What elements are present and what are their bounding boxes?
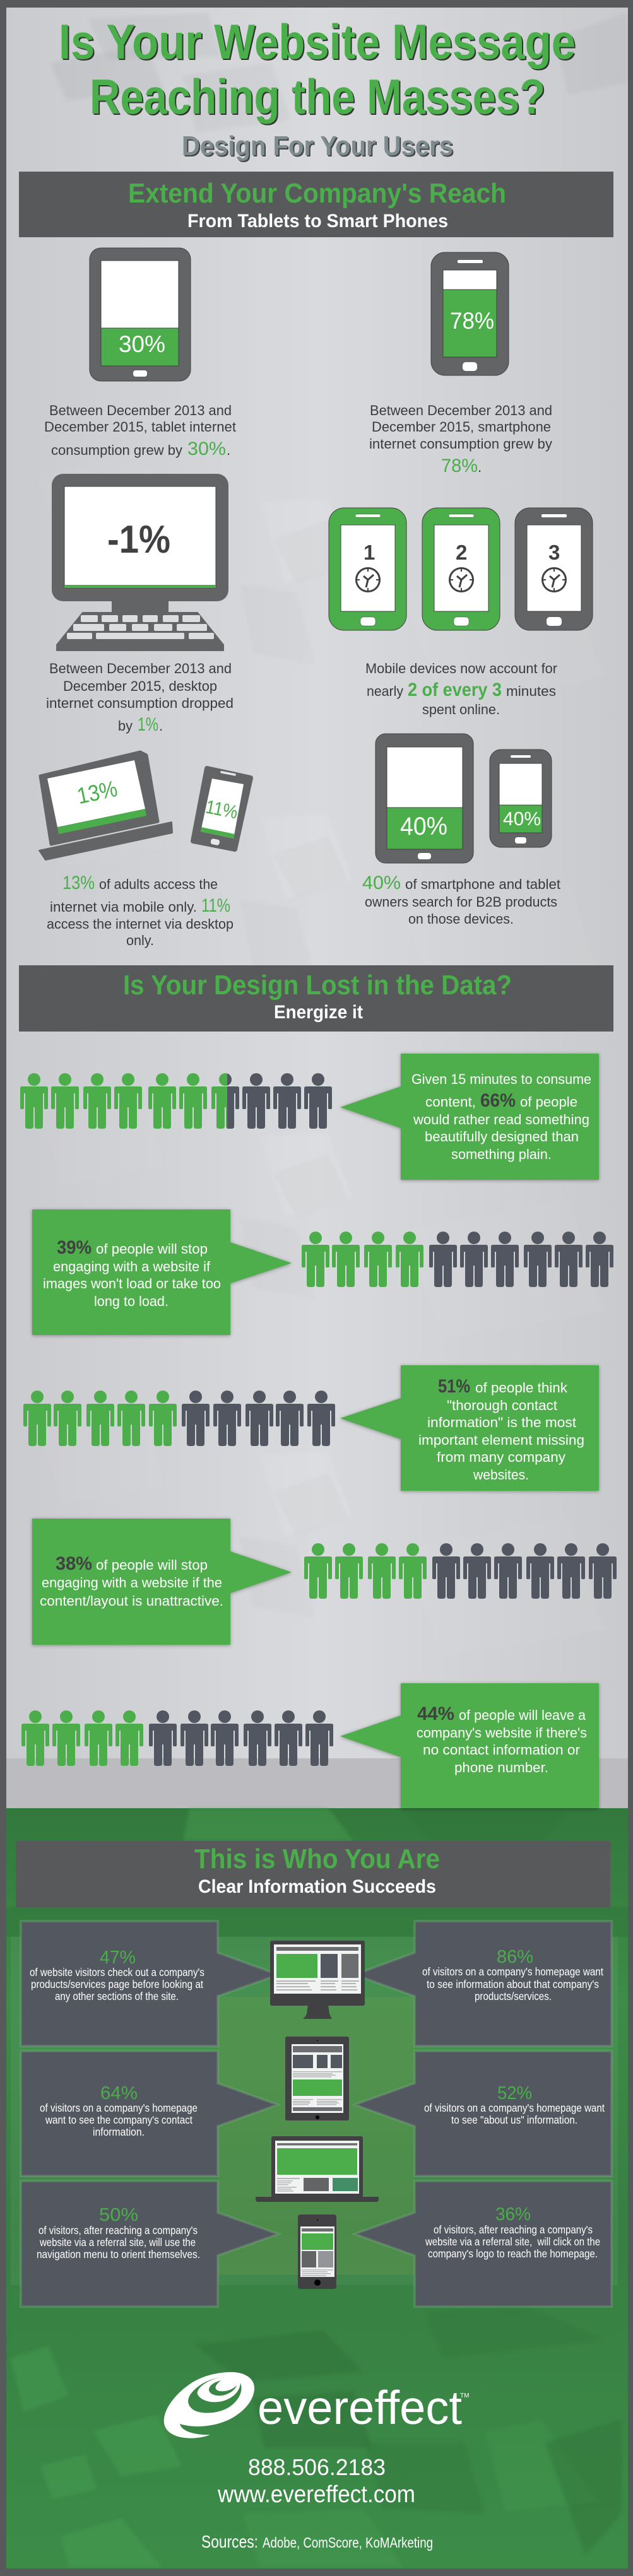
- icon: tablet 30%: [90, 248, 191, 381]
- icon: tablet 30%: 30%: [119, 331, 165, 357]
- icon: three phones with clocks: [329, 508, 593, 630]
- text: smartphone growth: 78%: [441, 456, 478, 476]
- panel: 47%: any other sections of the site.: [55, 1990, 179, 2003]
- icon: tilted phone 11%: 11%: [204, 797, 239, 823]
- icon: phone 78%: 78%: [450, 308, 494, 334]
- text: adults access: 13%: [62, 873, 95, 893]
- callout: 38%: content/layout is unattractive.: [40, 1593, 223, 1609]
- callout: 44%: company's website if there's: [417, 1725, 587, 1741]
- icon: desktop computer -1%: [52, 474, 228, 650]
- callout: 51%: information" is the most: [427, 1414, 576, 1430]
- callout: 51%: from many company: [437, 1449, 565, 1465]
- text: tablet growth: .: [227, 442, 230, 458]
- panel: 50%: navigation menu to orient themselves.: [37, 2248, 200, 2261]
- logo wordmark: TM: [460, 2392, 469, 2399]
- text: smartphone growth: .: [478, 459, 482, 475]
- icon: phone wireframe: [298, 2214, 336, 2289]
- panel: 52%: of visitors on a company's homepage want: [424, 2102, 605, 2114]
- callout: 44%: [340, 1683, 599, 1808]
- text: desktop drop: December 2015, desktop: [63, 678, 217, 694]
- text: smartphone growth: [369, 403, 552, 476]
- title: Reaching the Masses?: [90, 69, 545, 124]
- panel: 64%: want to see the company's contact: [45, 2114, 192, 2126]
- sources: [201, 2532, 433, 2551]
- phone 3: 3: [548, 541, 560, 564]
- sources: Adobe, ComScore, KoMArketing: [263, 2534, 433, 2551]
- panel: 50%: website via a referral site, will use the: [39, 2236, 196, 2249]
- callout: 51%: [340, 1365, 599, 1491]
- callout: 51%: "thorough contact: [447, 1397, 557, 1413]
- contact details: [217, 2454, 415, 2508]
- text: smartphone growth: internet consumption grew by: [369, 436, 552, 452]
- callout: 39%: 39%: [57, 1237, 92, 1258]
- callout: 66%: [340, 1054, 599, 1180]
- section header: extend reach: Extend Your Company's Reach: [128, 178, 506, 209]
- section header: extend reach: [19, 172, 613, 237]
- panel: 50%: of visitors, after reaching a company's: [38, 2224, 198, 2237]
- contact details: 888.506.2183: [248, 2454, 386, 2480]
- text: adults access: 11%: [201, 895, 230, 916]
- contact details: www.evereffect.com: [217, 2481, 415, 2508]
- text: desktop drop: internet consumption dropped: [46, 695, 234, 711]
- icon: laptop 13%: 13%: [74, 775, 119, 809]
- callout: 38%: 38%: [56, 1553, 92, 1574]
- callout: 66%: content,: [425, 1094, 476, 1110]
- panel: 52%: to see "about us" information.: [451, 2114, 577, 2126]
- panel: 50%: [21, 2181, 278, 2307]
- text: mobile minutes: spent online.: [422, 702, 500, 717]
- panel: 64%: [21, 2051, 278, 2176]
- panel: 52%: [355, 2051, 612, 2176]
- callout: 39%: [32, 1209, 292, 1335]
- callout: 66%: of people: [520, 1094, 577, 1110]
- text: tablet growth: consumption grew by: [51, 442, 182, 458]
- callout: 51%: important element missing: [418, 1432, 584, 1448]
- section header: design lost: [19, 965, 613, 1032]
- logo: evereffect: [164, 2372, 469, 2438]
- panel: 52%: 52%: [497, 2083, 532, 2103]
- text: mobile minutes: 2 of every 3: [408, 679, 502, 700]
- text: adults access: access the internet via desktop: [47, 916, 234, 932]
- text: mobile minutes: [365, 661, 557, 717]
- title: Is Your Website Message: [59, 14, 576, 69]
- callout: 44%: phone number.: [454, 1760, 548, 1775]
- text: smartphone growth: Between December 2013 and: [370, 403, 552, 418]
- text: adults access: [47, 873, 234, 948]
- panel: 86%: 86%: [497, 1947, 533, 1967]
- panel: 86%: [355, 1921, 612, 2046]
- section header: design lost: Is Your Design Lost in the Data?: [123, 970, 512, 1001]
- icon: desktop computer -1%: -1%: [107, 518, 170, 562]
- callout: 44%: no contact information or: [423, 1742, 580, 1758]
- icon: desktop wireframe: [270, 1941, 365, 2019]
- callout: 38%: of people will stop: [96, 1557, 208, 1573]
- text: smartphone growth: December 2015, smartphone: [372, 419, 551, 435]
- text: mobile minutes: Mobile devices now account for: [365, 661, 557, 676]
- panel: 47%: 47%: [100, 1948, 136, 1968]
- callout: 39%: engaging with a website if: [53, 1259, 211, 1274]
- text: adults access: of adults access the: [99, 876, 218, 892]
- title: [59, 14, 576, 124]
- subtitle: Design For Your Users: [182, 131, 453, 162]
- callout: 44%: of people will leave a: [459, 1707, 586, 1723]
- logo wordmark: evereffect: [257, 2381, 462, 2434]
- callout: 66%: beautifully designed than: [425, 1129, 579, 1144]
- section header: extend reach: From Tablets to Smart Phones: [187, 211, 448, 232]
- icon: phone 78%: [431, 252, 509, 375]
- people row 51%: [23, 1391, 335, 1446]
- callout: 66%: something plain.: [451, 1146, 552, 1162]
- text: desktop drop: .: [159, 718, 163, 734]
- phone 2: [422, 508, 500, 630]
- callout: 44%: 44%: [417, 1703, 454, 1724]
- callout: 51%: of people think: [475, 1380, 568, 1396]
- panel: 50%: 50%: [99, 2205, 138, 2225]
- panel: 47%: products/services page before looking at: [31, 1978, 203, 1991]
- phone 1: 1: [364, 541, 375, 564]
- section header: design lost: Energize it: [274, 1002, 363, 1023]
- icon: tablet wireframe: [285, 2037, 349, 2120]
- icon: phone 40%: [490, 750, 552, 847]
- panel: 86%: products/services.: [475, 1990, 552, 2003]
- green background: [6, 1808, 628, 2568]
- text: tablet growth: December 2015, tablet internet: [44, 419, 236, 435]
- callout: 39%: images won't load or take too: [43, 1276, 221, 1291]
- text: tablet growth: Between December 2013 and: [49, 403, 232, 418]
- panel: 86%: of visitors on a company's homepage want: [422, 1965, 603, 1978]
- phone 3: [515, 508, 593, 630]
- text: tablet growth: 30%: [187, 438, 226, 459]
- callout: 38%: [32, 1519, 292, 1645]
- section header: who you are: Clear Information Succeeds: [198, 1876, 436, 1897]
- text: mobile minutes: nearly: [367, 683, 403, 699]
- people row 66%: [20, 1073, 332, 1129]
- text: tablet growth: [44, 403, 236, 459]
- sources: Sources:: [201, 2532, 258, 2551]
- text: B2B search: on those devices.: [408, 911, 514, 927]
- people row 44%: [21, 1710, 333, 1766]
- callout: 51%: 51%: [438, 1376, 470, 1397]
- icon: phone 40%: 40%: [503, 808, 541, 830]
- callout: 39%: of people will stop: [96, 1241, 208, 1257]
- panel: 47%: [21, 1921, 278, 2046]
- callout: 66%: 66%: [480, 1090, 516, 1111]
- text: mobile minutes: minutes: [506, 683, 556, 699]
- panel: 36%: website via a referral site, will click on the: [425, 2235, 600, 2248]
- icon: tilted phone 11%: [193, 768, 251, 849]
- icon: tablet 40%: 40%: [400, 813, 447, 840]
- panel: 64%: information.: [93, 2126, 145, 2138]
- callout: 66%: Given 15 minutes to consume: [411, 1071, 591, 1087]
- text: B2B search: owners search for B2B products: [365, 894, 557, 910]
- gray background: [6, 8, 628, 1808]
- text: desktop drop: by: [118, 718, 133, 734]
- phone 2: 2: [456, 541, 467, 564]
- panel: 36%: 36%: [495, 2204, 531, 2225]
- people row 38%: [304, 1543, 617, 1599]
- panel: 36%: company's logo to reach the homepage.: [428, 2247, 598, 2260]
- phone 1: [329, 508, 406, 630]
- text: B2B search: [362, 873, 560, 927]
- panel: 64%: 64%: [100, 2083, 138, 2103]
- panel: 86%: to see information about that company's: [427, 1978, 599, 1991]
- panel: 47%: of website visitors check out a company's: [30, 1966, 204, 1979]
- text: adults access: only.: [126, 932, 154, 948]
- callout: 39%: long to load.: [94, 1293, 169, 1309]
- callout: 66%: would rather read something: [413, 1112, 589, 1127]
- logo swirl: [164, 2372, 254, 2438]
- panel: 64%: of visitors on a company's homepage: [40, 2102, 198, 2114]
- text: B2B search: of smartphone and tablet: [405, 876, 560, 892]
- icon: tablet 40%: [376, 734, 473, 863]
- people row 39%: [302, 1232, 613, 1287]
- text: adults access: internet via mobile only.: [50, 899, 197, 915]
- panel: 36%: of visitors, after reaching a company's: [434, 2223, 593, 2236]
- text: desktop drop: [46, 661, 234, 735]
- callout: 51%: websites.: [473, 1467, 529, 1483]
- section header: who you are: This is Who You Are: [194, 1844, 440, 1874]
- callout: 38%: engaging with a website if the: [42, 1575, 222, 1591]
- text: desktop drop: 1%: [138, 714, 158, 735]
- section header: who you are: [16, 1841, 610, 1907]
- panel: 36%: [355, 2181, 612, 2307]
- text: desktop drop: Between December 2013 and: [49, 661, 232, 676]
- icon: laptop wireframe: [256, 2136, 379, 2202]
- text: B2B search: 40%: [362, 873, 401, 893]
- icon: laptop 13%: [39, 752, 172, 860]
